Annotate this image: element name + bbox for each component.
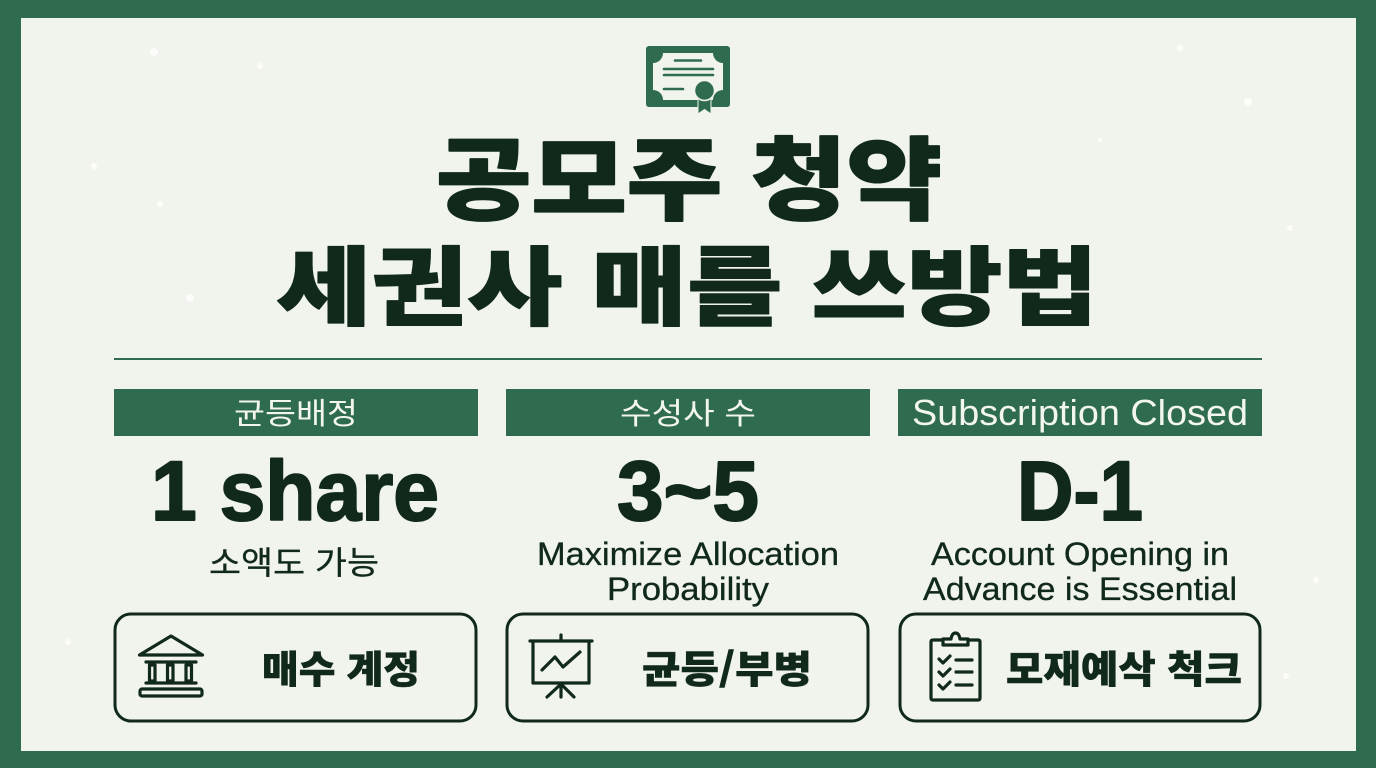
heading: brokers: 수성사 수	[620, 389, 756, 433]
caption: maximize allocation	[537, 536, 839, 607]
button: buy account	[115, 614, 476, 721]
caption: account opening	[923, 536, 1237, 607]
icon: bank	[140, 636, 202, 696]
panel: number of brokers	[506, 389, 870, 721]
caption: account opening: Advance is Essential	[923, 571, 1237, 607]
icon: certificate	[646, 46, 730, 114]
caption: small amounts possible: 소액도 가능	[209, 538, 379, 584]
button: equal/proportional	[507, 614, 868, 721]
title: 공모주 청약	[436, 108, 942, 238]
caption: maximize allocation: Probability	[607, 571, 769, 607]
icon: presentation chart	[530, 635, 592, 697]
button: buy account: 매수 계정	[262, 639, 420, 694]
button: reservation check: 모재예삭 척크	[1006, 639, 1242, 694]
panel: subscription closed	[898, 389, 1262, 721]
button: equal/proportional: 균등/부병	[642, 639, 812, 694]
stat: D-1: D-1	[1017, 444, 1143, 538]
heading: subscription closed: Subscription Closed	[912, 392, 1248, 433]
heading: equal allocation: 균등배정	[234, 389, 358, 433]
stat: 3~5: 3~5	[617, 444, 759, 538]
stat: 1 share: 1 share	[151, 444, 439, 538]
heading: brokers	[506, 389, 870, 436]
heading: equal allocation	[114, 389, 478, 436]
caption: account opening: Account Opening in	[931, 536, 1229, 572]
caption: maximize allocation: Maximize Allocation	[537, 536, 839, 572]
icon: clipboard checklist	[931, 633, 980, 700]
title	[276, 108, 1098, 343]
button: reservation check	[900, 614, 1260, 721]
panel: equal allocation	[114, 389, 478, 721]
title: 세권사 매를 쓰방법	[276, 218, 1098, 343]
